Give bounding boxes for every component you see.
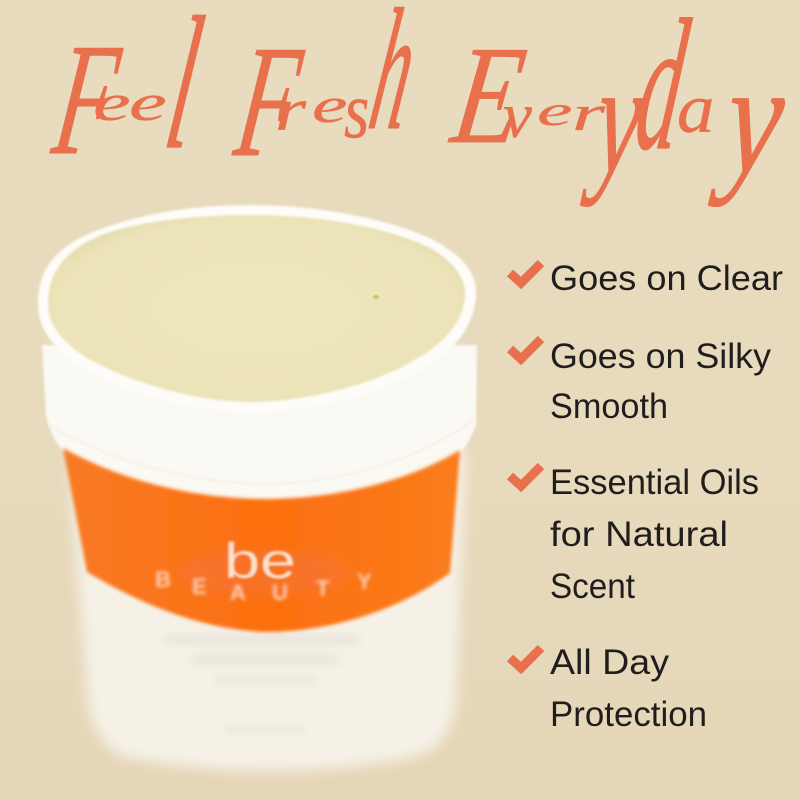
Fresh: r [275, 77, 307, 144]
item: goes on silky smooth [510, 337, 772, 426]
Feel: e [129, 74, 167, 132]
logo mark: be [224, 533, 296, 589]
brand name: BEAUTY [155, 567, 372, 605]
Feel [44, 0, 214, 189]
jar body [68, 450, 466, 771]
label: Goes on Silky [550, 337, 772, 376]
wax surface [48, 215, 465, 402]
Everyday: a [677, 69, 714, 147]
label: Goes on Clear [550, 259, 783, 298]
label: for Natural [550, 515, 728, 554]
orange label band [63, 448, 460, 632]
label: Protection [550, 695, 707, 734]
Feel: F [44, 11, 130, 188]
icon: check [510, 648, 541, 668]
Fresh: e [312, 79, 348, 133]
Everyday: y [579, 30, 652, 207]
product jar [38, 205, 477, 771]
item: all day protection [510, 643, 707, 734]
label: Essential Oils [550, 463, 759, 502]
blurred label small print [165, 635, 360, 733]
label: Scent [550, 567, 635, 606]
collar ridge [48, 420, 474, 484]
white collar [42, 345, 477, 505]
logo [155, 533, 372, 605]
wax speck [373, 295, 379, 299]
Everyday: e [537, 88, 573, 134]
Fresh [226, 0, 429, 190]
benefits list [510, 259, 783, 734]
label: All Day [550, 643, 670, 682]
Everyday: y [707, 31, 792, 208]
item: goes on clear [510, 259, 783, 298]
icon: check [510, 466, 541, 486]
icon: check [510, 263, 541, 283]
rim [38, 205, 476, 412]
title [44, 0, 792, 208]
Everyday: v [503, 80, 532, 152]
Fresh: F [226, 13, 312, 190]
Fresh: s [344, 66, 369, 155]
icon: check [510, 339, 541, 359]
Feel: e [93, 74, 131, 132]
label: Smooth [550, 387, 668, 426]
Everyday: r [572, 86, 606, 141]
logo backdrop [177, 548, 347, 596]
Everyday [443, 0, 792, 208]
Everyday: E [443, 18, 534, 173]
item: essential oils [510, 463, 759, 606]
